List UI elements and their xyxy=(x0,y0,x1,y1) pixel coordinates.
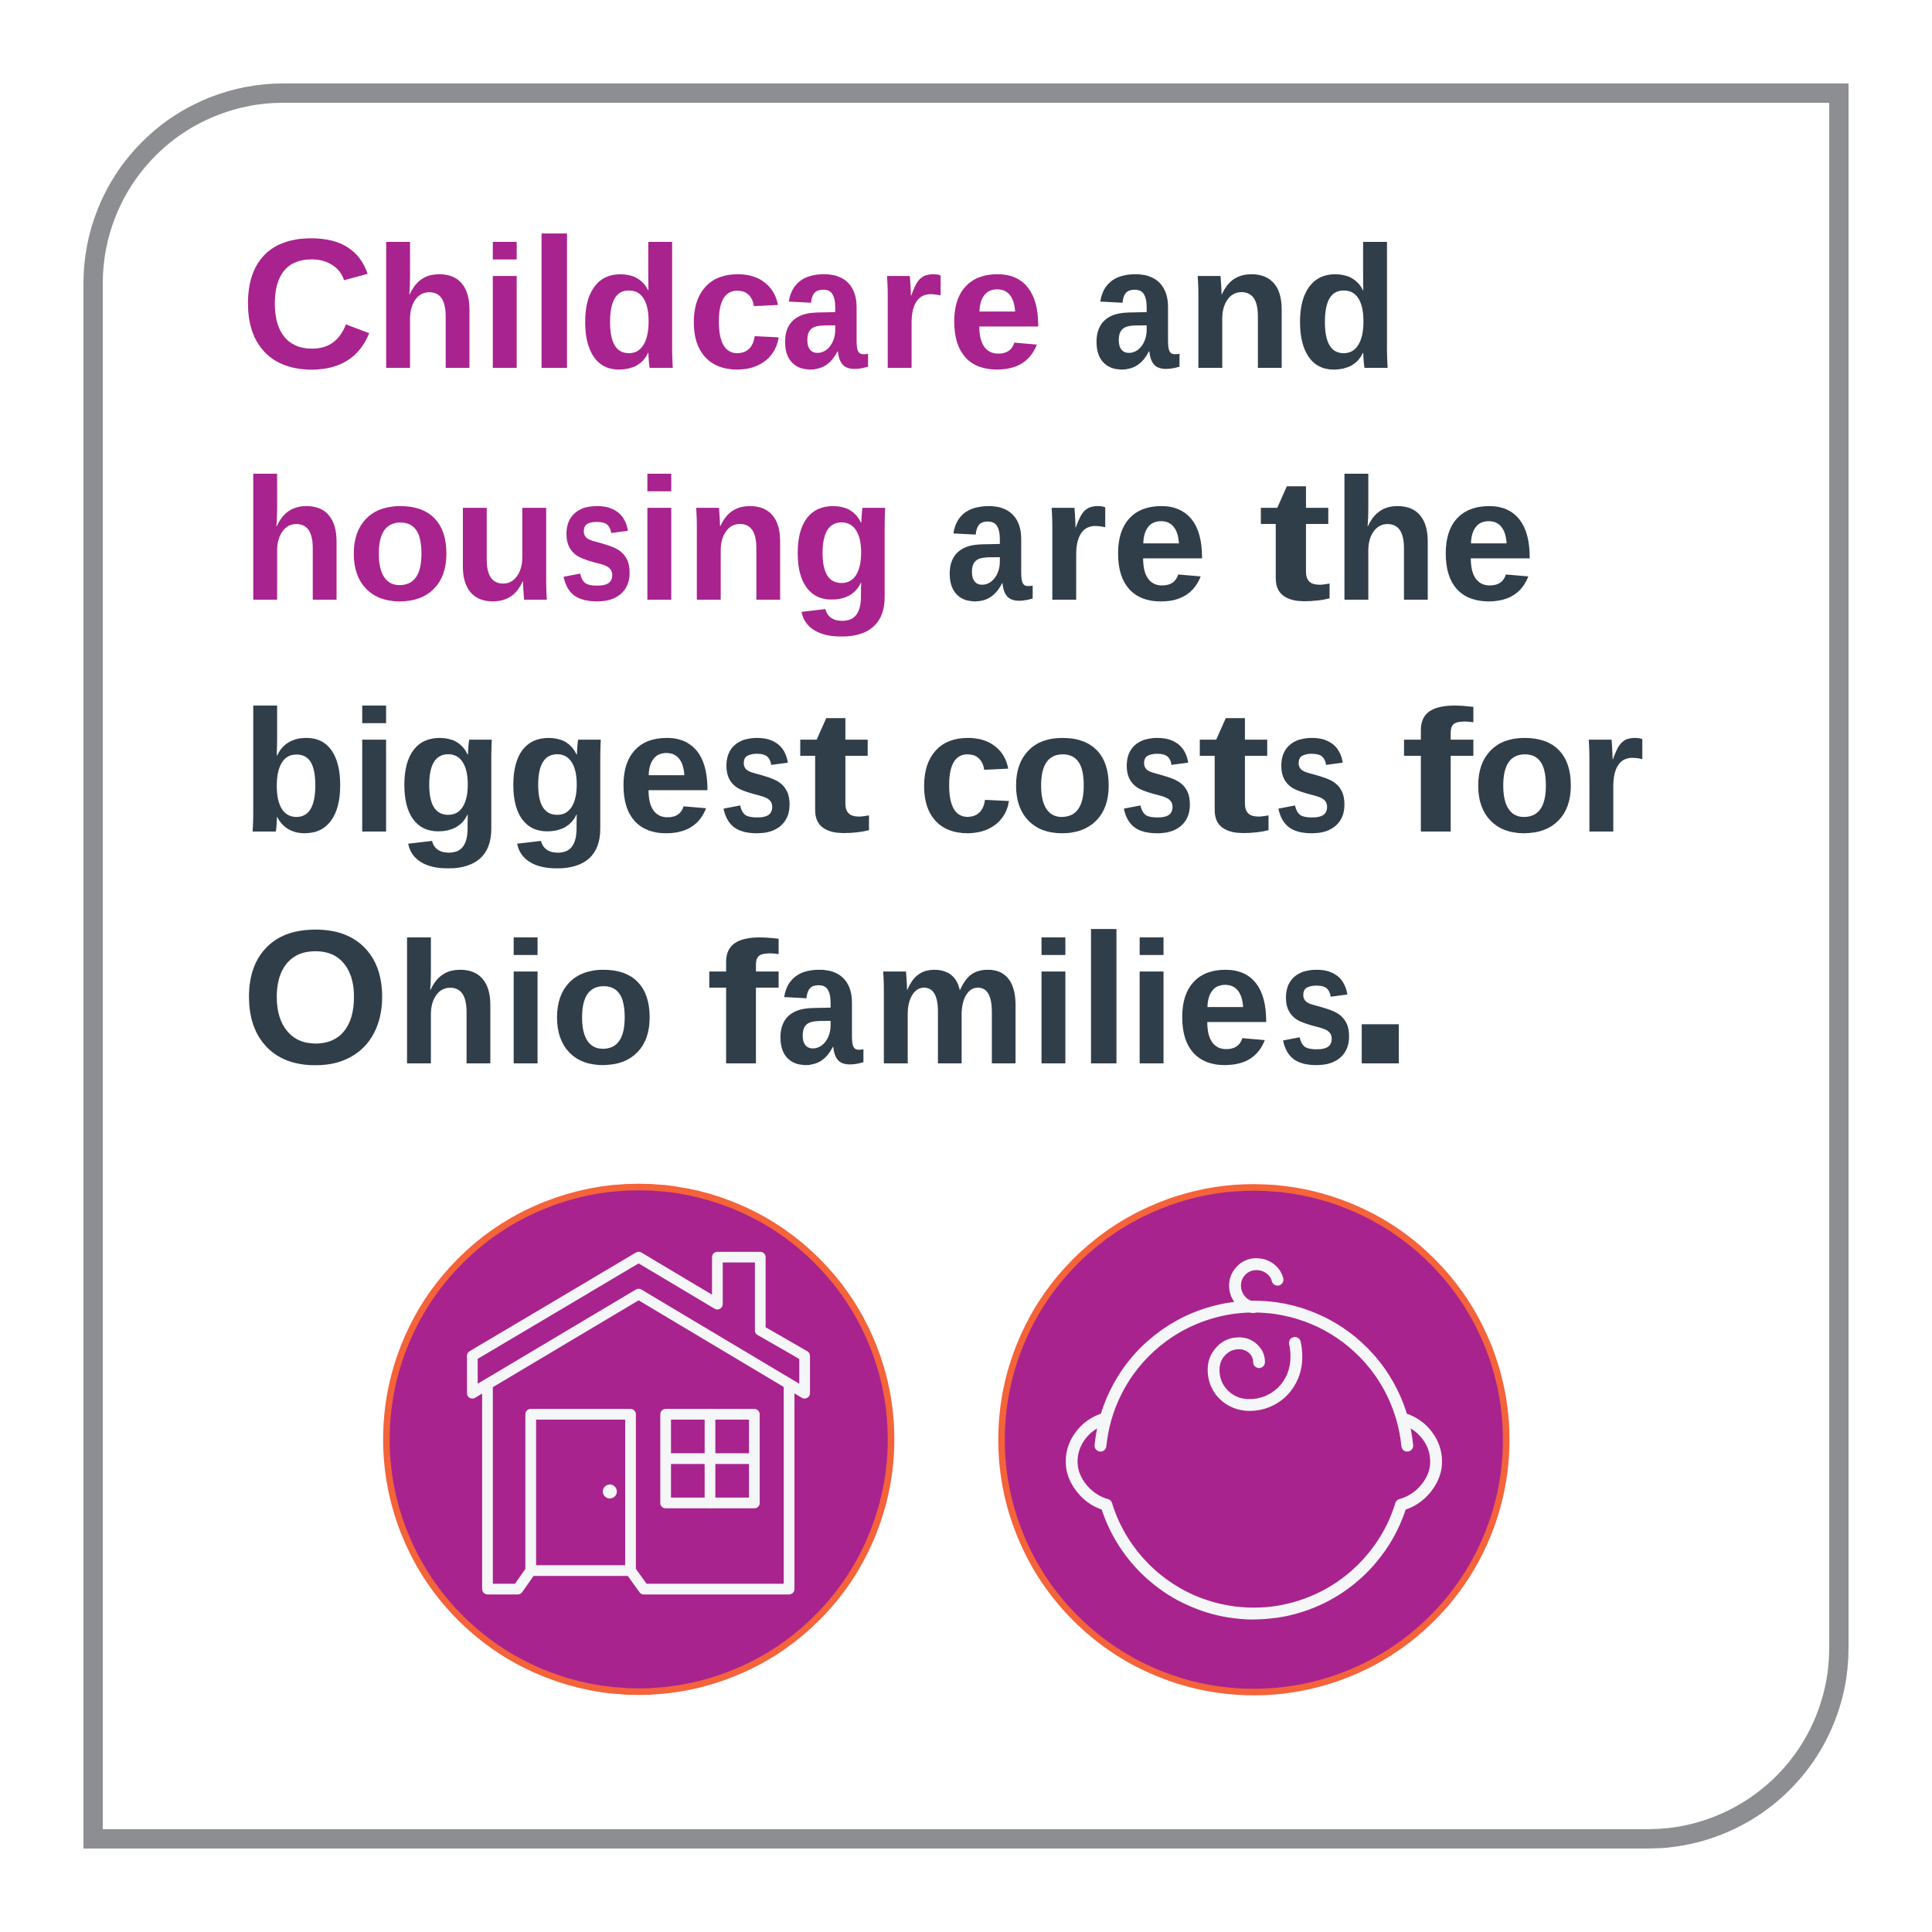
heading line 4: . xyxy=(1344,826,1417,1120)
heading line 1: hi xyxy=(374,210,529,405)
heading line 4 xyxy=(241,826,1417,1120)
heading line 2 xyxy=(241,442,1536,637)
heading line 3: s xyxy=(1274,674,1350,869)
heading line 3: co xyxy=(917,674,1115,869)
heading line 3: f xyxy=(1400,674,1474,869)
heading line 2: he xyxy=(1332,442,1536,637)
baby line art xyxy=(1072,1264,1436,1614)
icon: house in purple circle xyxy=(386,1187,891,1692)
heading line 4: a xyxy=(776,906,864,1100)
heading line 1 xyxy=(240,200,1399,407)
heading line 3: t xyxy=(798,674,872,869)
heading line 3: or xyxy=(1471,674,1645,869)
heading line 4: O xyxy=(241,889,390,1104)
heading line 4: hio xyxy=(395,906,656,1100)
heading line 1: C xyxy=(240,200,374,407)
heading line 3: s xyxy=(1119,674,1196,869)
heading line 3: bigge xyxy=(241,674,713,869)
heading line 4: mi xyxy=(872,906,1078,1100)
heading line 3: t xyxy=(1197,674,1271,869)
house line art xyxy=(472,1257,804,1589)
heading line 1: a xyxy=(781,210,869,405)
icon: baby face in purple circle xyxy=(1002,1187,1506,1692)
heading line 1: l xyxy=(529,200,580,407)
heading line 2: a xyxy=(945,442,1033,637)
heading line 2: hou xyxy=(241,442,558,637)
heading line 2: ing xyxy=(635,442,896,637)
circle badge: baby xyxy=(1002,1187,1506,1692)
heading line 3: s xyxy=(719,674,795,869)
heading line 2: t xyxy=(1258,442,1332,637)
heading line 4: ie xyxy=(1128,906,1272,1100)
heading line 4: s xyxy=(1278,906,1355,1100)
heading line 1: dc xyxy=(578,210,784,405)
heading line 1: nd xyxy=(1186,210,1399,405)
heading line 2: re xyxy=(1040,442,1208,637)
heading line 4: f xyxy=(706,906,779,1100)
heading line 1: re xyxy=(876,210,1044,405)
heading line 3 xyxy=(241,674,1645,869)
heading line 4: l xyxy=(1078,896,1130,1103)
heading: main statement xyxy=(240,200,1645,1120)
heading line 1: a xyxy=(1092,210,1180,405)
circle badge: house xyxy=(386,1187,891,1692)
heading line 2: s xyxy=(559,442,635,637)
